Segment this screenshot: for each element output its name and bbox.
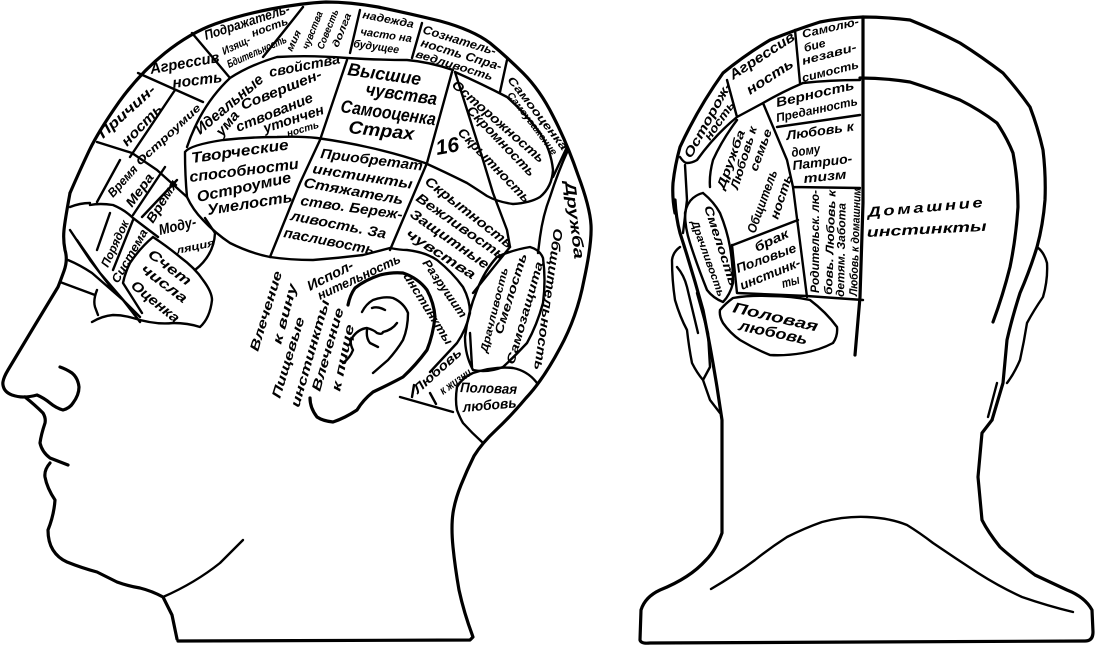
text on left head: ность [118, 101, 165, 149]
inner ear folds [343, 297, 408, 373]
text on right head: Патрио- [792, 151, 853, 173]
text on left head: Страх [348, 117, 416, 144]
text on left head: Творческие [190, 136, 290, 167]
text on left head: пасливость [282, 224, 376, 257]
text on left head: Осторожность [449, 77, 548, 166]
skull outline [673, 17, 1045, 420]
text on left head: Бдительность [225, 34, 289, 71]
text on left head: ность Спра- [419, 35, 504, 73]
text on right head: любовь [736, 317, 809, 348]
text on left head: Скрытность [422, 174, 516, 251]
text on left head: мия [285, 29, 304, 53]
text on left head: Идеальные [192, 71, 267, 138]
text on left head: будущее [353, 38, 400, 56]
skull and back of neck outline [70, 2, 591, 641]
text on right head: бовь. Любовь к [823, 188, 839, 295]
text on left head: способности [188, 156, 300, 186]
sexual love oval [720, 296, 837, 355]
text on left head: Приобретат [320, 145, 424, 174]
text on left head: Половая [460, 379, 517, 397]
text on left head: 16 [434, 133, 461, 160]
text on right head: Домашние [866, 194, 986, 220]
text on left head: к жизни [437, 365, 475, 397]
text on right head [681, 16, 987, 348]
left forehead regions [70, 160, 215, 270]
text on left head: Время [105, 162, 141, 200]
text on left head: ляция [174, 237, 216, 257]
text on right head: Драчливость [688, 218, 727, 298]
text on left head: Оценка [128, 277, 183, 326]
text on left head: Изящ- [220, 34, 253, 58]
large oval of creative abilities [185, 72, 553, 372]
text on right head: незави- [801, 42, 858, 68]
text on right head: Верность [774, 77, 856, 110]
text on left head: Агрессив [148, 49, 221, 78]
text on left head: ность [250, 16, 290, 40]
text on right head: ность [768, 173, 795, 221]
text on right head: тизм [803, 167, 848, 186]
text on right head: бие [803, 37, 828, 55]
text on right head: Общитель [744, 168, 780, 235]
text on left head: Самооценка [505, 74, 570, 153]
text on left head: Испол- [304, 257, 356, 294]
text on left head: Пищевые [269, 315, 307, 400]
text on left head: инстинкты [400, 270, 456, 348]
text on left head: Умелость [206, 189, 294, 219]
text on right head: Любовь к [727, 124, 760, 192]
ear [310, 273, 435, 422]
courage oval [685, 193, 733, 302]
brow and eye lines [60, 230, 173, 323]
text on left head: Стяжатель [302, 174, 405, 207]
text on right head: ты [780, 272, 801, 291]
text on left head: Совесть [316, 8, 342, 51]
text on left head: утончен [260, 101, 326, 136]
text on right head: инстинк- [738, 255, 802, 293]
text on right head: брак [752, 225, 792, 255]
shoulder and neck hump line [711, 517, 1073, 612]
text on left head: свойства [268, 50, 341, 80]
text on left head: к пище [328, 323, 357, 393]
text on left head: Порядок [98, 217, 132, 269]
text on left head: к вину [269, 281, 300, 346]
text on left head: Счет [145, 246, 195, 288]
text on left head: Остроумие [134, 102, 203, 168]
text on left head: Влечение [247, 269, 285, 353]
text on left head: Любовь [409, 345, 465, 397]
text on right head: Половая [731, 299, 820, 336]
text on left head: числа [138, 261, 191, 306]
right ear [988, 247, 1047, 417]
text on left head: любовь [461, 394, 517, 415]
text on right head: Смелость [701, 204, 740, 288]
text on left head: инстинкты [287, 298, 332, 409]
left skull and neck line [640, 200, 1093, 643]
text on right head: Любовь к домашним [848, 187, 864, 297]
text on left head: ность [286, 120, 320, 140]
text on left head: Самооценка [339, 96, 437, 129]
text on left head: нительность [315, 251, 403, 303]
text on right head: Осторож- [681, 80, 734, 160]
left head: profile view [3, 1, 591, 641]
text on right head: семье [747, 127, 775, 173]
text on left head: Самозащита [503, 260, 546, 366]
text on left head [94, 1, 587, 415]
text on left head: Совершен- [238, 66, 324, 113]
text on right head: Самолю- [801, 16, 860, 41]
number oval [123, 237, 212, 327]
text on left head: Время [143, 177, 181, 226]
jaw line [163, 540, 243, 597]
face profile [3, 193, 79, 410]
text on right head: Половые [734, 240, 798, 276]
text on right head: Родительск. лю- [810, 190, 822, 293]
text on left head: Смелость [492, 252, 530, 336]
text on left head: Драчливость [478, 266, 511, 355]
text on left head: чувства [301, 10, 326, 51]
mouth and chin [25, 397, 177, 639]
centre line [855, 17, 863, 355]
text on left head: Высшие [346, 59, 423, 89]
text on left head: ство. Береж- [300, 192, 404, 222]
left ear [672, 165, 720, 413]
text on right head: симость [801, 59, 860, 85]
text on left head: Скрытность [455, 125, 534, 206]
text on left head: инстинкты [312, 160, 414, 192]
text on left head: Дружба [561, 178, 587, 260]
inner arc of domestic instincts [860, 78, 1018, 322]
love oval and lower lines [400, 333, 537, 442]
courage oval [465, 147, 568, 371]
text on left head: чувства [403, 226, 479, 282]
text on right head: Дружба [713, 128, 748, 192]
skull region dividers [97, 7, 510, 257]
text on left head: долга [331, 11, 354, 49]
text on left head: Причин- [94, 81, 159, 141]
text on left head: Остроумие [195, 169, 293, 206]
text on right head: дому [790, 141, 822, 160]
text on left head: чувства [364, 79, 439, 109]
text on left head: Система [108, 226, 151, 286]
text on left head: часто на [360, 26, 413, 45]
text on left head: Моду- [157, 214, 198, 239]
text on right head: Агрессив [725, 28, 798, 83]
text on left head: Вежливость [413, 190, 508, 263]
text on left head: Самоуважение [505, 90, 560, 158]
text on left head: Мера [122, 170, 157, 210]
text on right head: Любовь к [784, 118, 856, 143]
text on left head: ума [211, 107, 242, 140]
text on left head: ведливость [414, 48, 494, 83]
text on left head: Общительность [531, 228, 566, 371]
text on left head: ность [171, 69, 223, 92]
text on right head: Преданность [775, 94, 859, 125]
text on left head: Влечение [308, 306, 347, 393]
text on left head: надежда [361, 9, 415, 31]
text on left head: ливость. За [288, 207, 388, 241]
text on left head: ствование [233, 89, 315, 135]
text on right head: инстинкты [866, 218, 987, 240]
right head region dividers [680, 30, 863, 300]
text on left head: Разрушит [420, 257, 470, 321]
text on right head: ность [701, 99, 738, 143]
text on left head: Защитные [407, 206, 493, 272]
text on right head: ность [743, 55, 796, 98]
text on left head: Скромность [464, 103, 539, 179]
right head: rear view [640, 16, 1093, 643]
text on left head: Сознатель- [421, 22, 498, 58]
text on right head: детям. Забота [835, 202, 849, 297]
